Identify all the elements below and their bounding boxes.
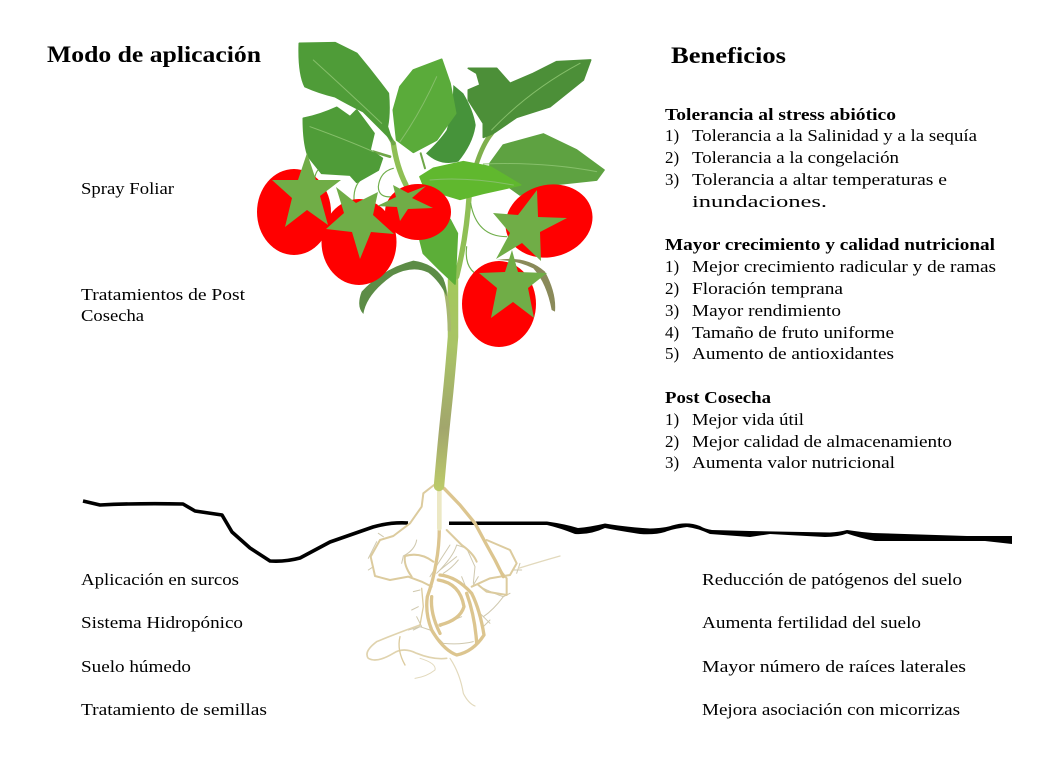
leaf lower — [420, 219, 457, 284]
tomato 3 — [385, 184, 451, 240]
plant roots — [367, 485, 560, 706]
tomato 4 — [497, 175, 601, 267]
soil application methods: Aplicación en surcos — [81, 570, 239, 589]
leaf upper right — [468, 60, 591, 137]
benefits: post harvest: Mejor vida útil — [692, 410, 804, 429]
benefits: abiotic stress tolerance — [665, 105, 977, 211]
leaf left — [303, 107, 382, 182]
aerial application methods: Spray Foliar — [81, 179, 174, 198]
soil application methods: Tratamiento de semillas — [81, 700, 267, 719]
benefits: abiotic stress tolerance: Tolerancia al stress abiótico — [665, 105, 896, 124]
upper stems — [373, 123, 492, 330]
ground line right — [449, 522, 1012, 544]
benefits: abiotic stress tolerance: Tolerancia a la Salinidad y a la sequía — [692, 126, 977, 145]
soil benefits: Mejora asociación con micorrizas — [702, 700, 960, 719]
benefits: post harvest: Post Cosecha — [665, 388, 772, 407]
benefits: growth and nutritional quality: 2) — [665, 279, 679, 298]
benefits: post harvest: Mejor calidad de almacenamiento — [692, 432, 952, 451]
benefits: abiotic stress tolerance: Tolerancia a altar temperaturas e — [692, 170, 947, 189]
heading: beneficios: Beneficios — [671, 43, 786, 68]
main root loops — [427, 488, 503, 655]
leaf centre bright — [420, 162, 521, 199]
star 3 — [377, 185, 433, 221]
benefits: abiotic stress tolerance: 2) — [665, 148, 679, 167]
soil benefits: Aumenta fertilidad del suelo — [702, 613, 921, 632]
aerial application methods: Cosecha — [81, 306, 144, 325]
benefits: post harvest: 3) — [665, 453, 679, 472]
star 2 — [326, 187, 394, 259]
benefits: growth and nutritional quality: 3) — [665, 301, 679, 320]
benefits: post harvest: Aumenta valor nutricional — [692, 453, 895, 472]
main stem — [439, 280, 453, 486]
benefits: growth and nutritional quality: Mayor rendimiento — [692, 301, 841, 320]
benefits: abiotic stress tolerance: inundaciones. — [692, 192, 827, 211]
aerial application methods: Tratamientos de Post — [81, 285, 245, 304]
benefits: growth and nutritional quality: Aumento de antioxidantes — [692, 344, 894, 363]
leaf upper left — [299, 43, 392, 140]
soil benefits: Reducción de patógenos del suelo — [702, 570, 962, 589]
benefits: growth and nutritional quality: Mayor crecimiento y calidad nutricional — [665, 235, 995, 254]
benefits: post harvest — [665, 388, 952, 472]
leaf veins — [310, 60, 597, 185]
tomato 2 — [322, 199, 396, 285]
plant stem and foliage — [299, 43, 604, 330]
soil benefits: Mayor número de raíces laterales — [702, 657, 966, 676]
benefits: abiotic stress tolerance: Tolerancia a la congelación — [692, 148, 900, 167]
benefits: growth and nutritional quality: 5) — [665, 344, 679, 363]
leaf behind centre — [426, 85, 476, 163]
soil benefits — [702, 570, 966, 719]
benefits: growth and nutritional quality: Mejor crecimiento radicular y de ramas — [692, 257, 996, 276]
star 5 — [479, 250, 547, 318]
aerial application methods — [81, 179, 245, 325]
heading: modo de aplicación: Modo de aplicación — [47, 42, 261, 67]
tomato 5 — [462, 261, 536, 347]
benefits: post harvest: 1) — [665, 410, 679, 429]
soil application methods: Suelo húmedo — [81, 657, 191, 676]
leaf right — [490, 134, 604, 195]
star 4 — [493, 190, 567, 261]
ground line left — [83, 501, 408, 561]
benefits: abiotic stress tolerance: 3) — [665, 170, 679, 189]
benefits: growth and nutritional quality — [665, 235, 996, 363]
benefits: growth and nutritional quality: Floración temprana — [692, 279, 844, 298]
benefits: growth and nutritional quality: 1) — [665, 257, 679, 276]
curved leaf left — [359, 261, 447, 314]
tendrils — [315, 165, 507, 278]
root crown — [432, 488, 446, 528]
soil application methods: Sistema Hidropónico — [81, 613, 243, 632]
benefits: growth and nutritional quality: Tamaño de fruto uniforme — [692, 323, 894, 342]
fine root hairs — [368, 533, 522, 644]
secondary roots — [367, 485, 560, 706]
leaf centre — [393, 59, 456, 152]
star 1 — [272, 153, 341, 227]
soil application methods — [81, 570, 267, 719]
tomato 1 — [257, 169, 331, 255]
benefits: post harvest: 2) — [665, 432, 679, 451]
curved leaf right — [497, 259, 555, 312]
benefits: growth and nutritional quality: 4) — [665, 323, 679, 342]
benefits: abiotic stress tolerance: 1) — [665, 126, 679, 145]
